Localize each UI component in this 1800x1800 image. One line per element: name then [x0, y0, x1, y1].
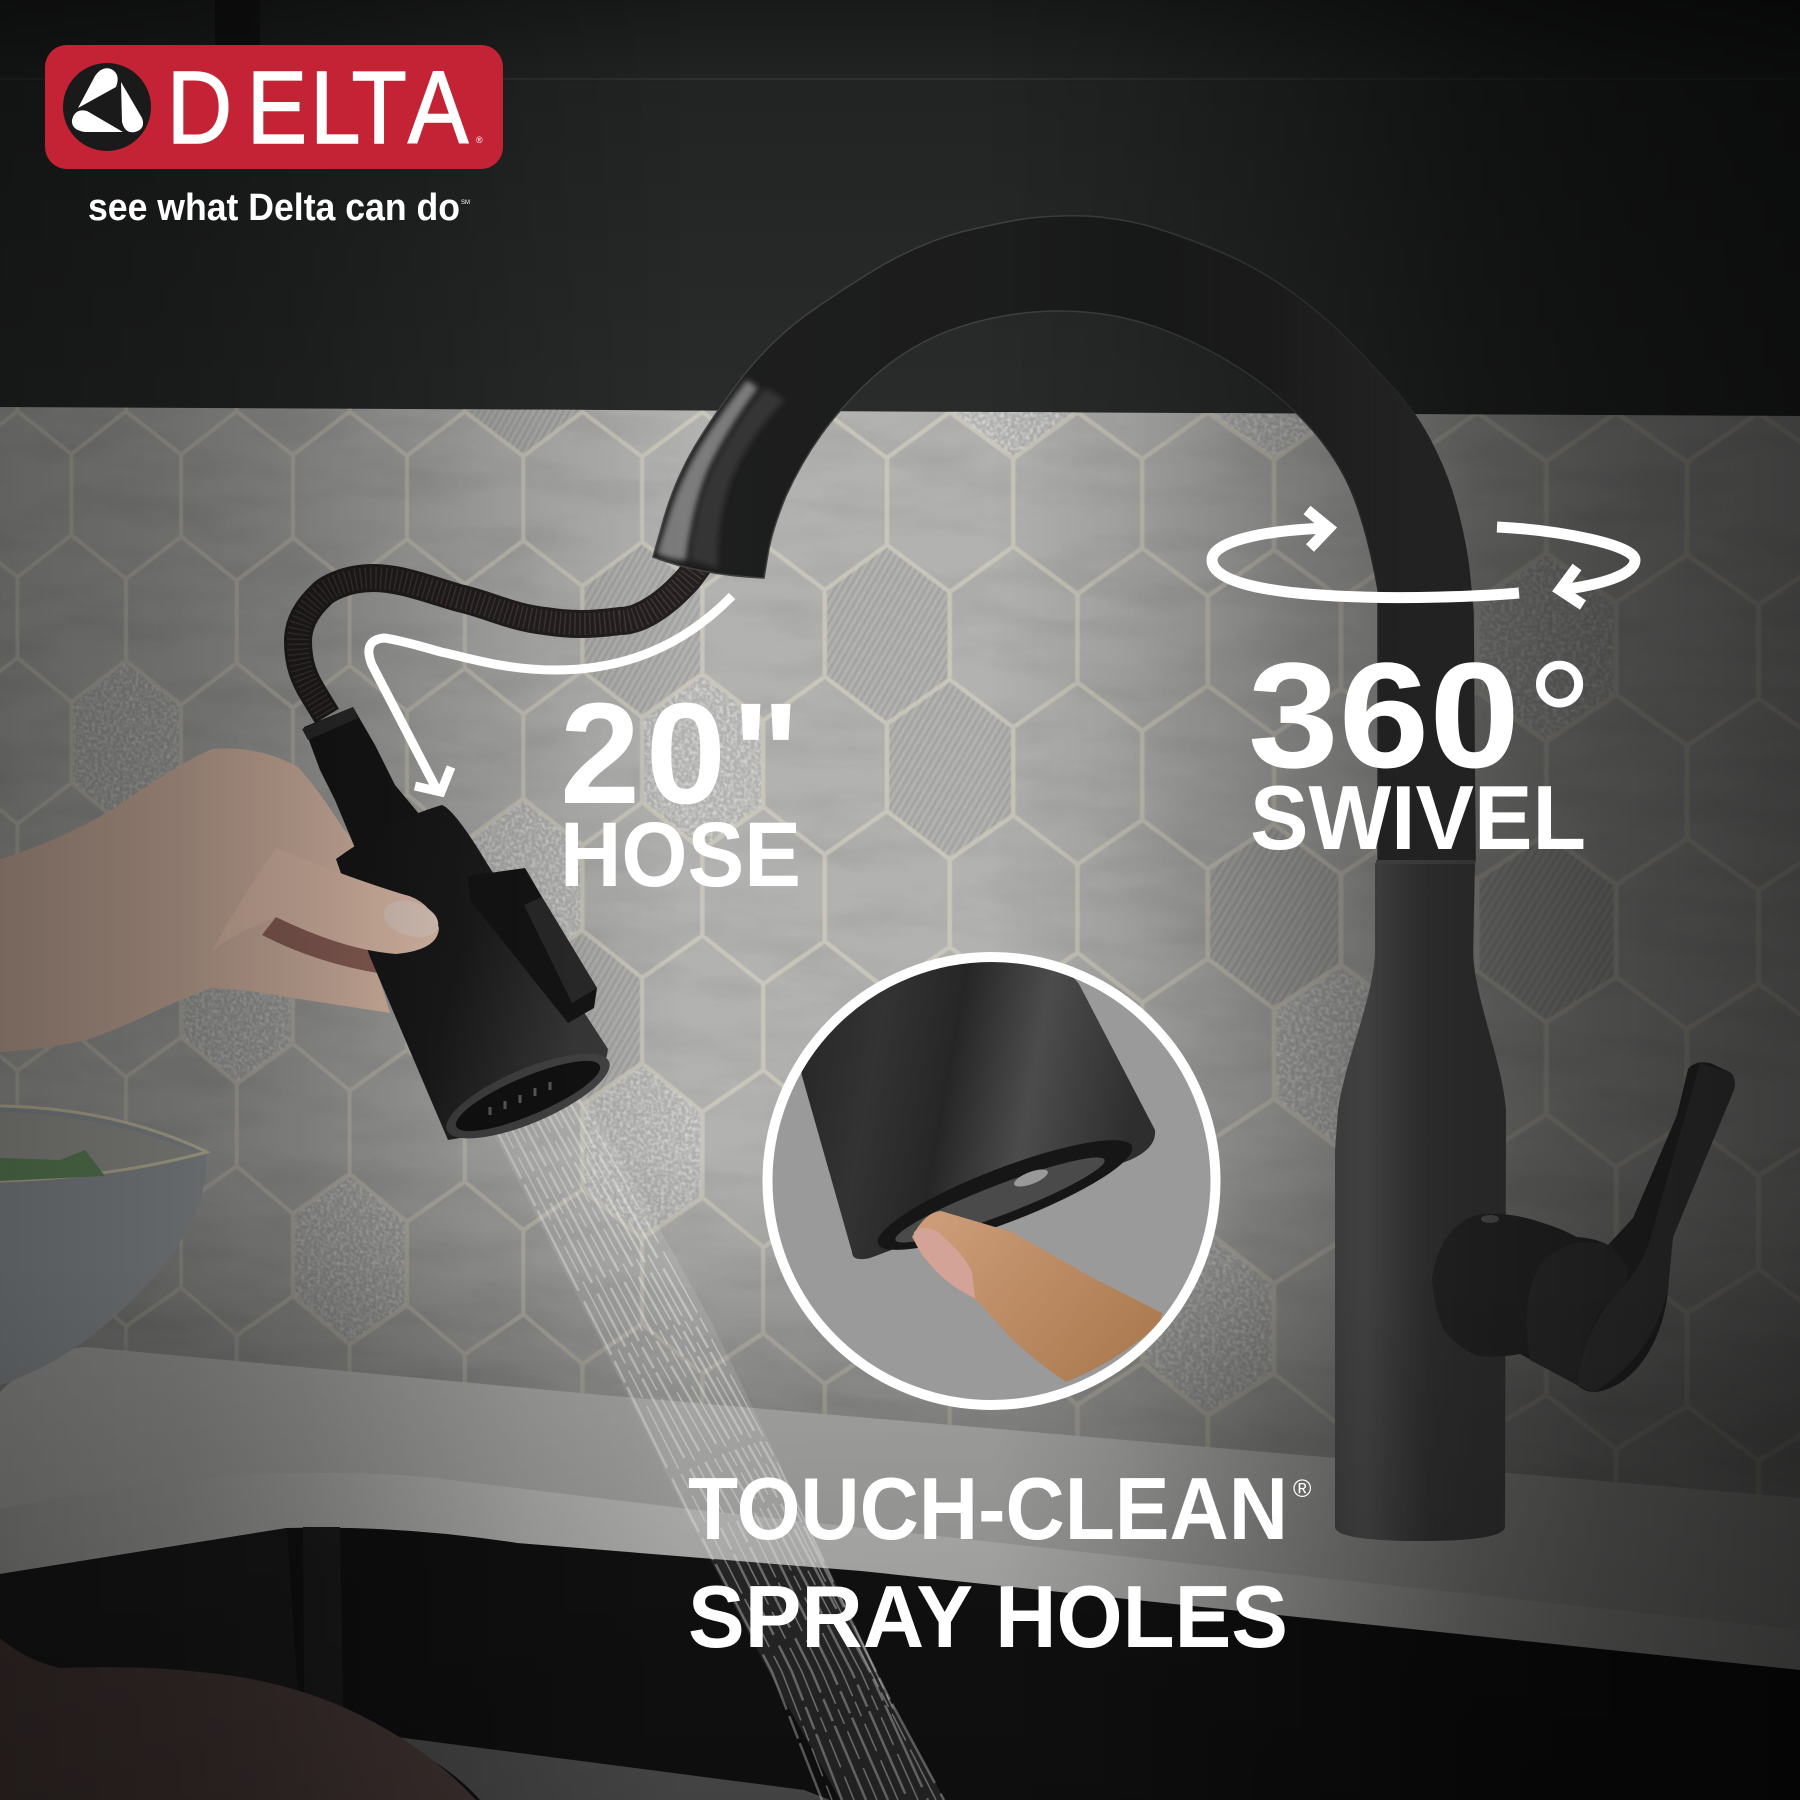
faucet spout arc — [653, 216, 1475, 861]
label: touch-clean spray holes — [688, 1459, 1312, 1666]
logo: Delta: ® — [476, 135, 483, 145]
logo: Delta — [45, 45, 503, 229]
label: touch-clean spray holes: ® — [1293, 1475, 1312, 1503]
label: 360 degree swivel — [1248, 626, 1593, 869]
sprayer buttons — [468, 868, 597, 1023]
hose connector — [304, 707, 420, 860]
faucet handle — [1432, 1062, 1735, 1392]
logo badge — [45, 45, 503, 169]
label: 360 degree swivel: ° — [1526, 626, 1593, 814]
hose — [298, 552, 708, 716]
label: touch-clean spray holes: TOUCH-CLEAN — [688, 1459, 1288, 1558]
faucet body — [1335, 863, 1506, 1541]
hand holding sprayer — [0, 748, 490, 1052]
background: hexagonal tile backsplash — [0, 407, 1790, 1447]
second hand at sink — [0, 1638, 476, 1800]
inset: fingertip — [912, 1211, 1162, 1382]
label: touch-clean spray holes: SPRAY HOLES — [688, 1567, 1288, 1666]
sprayer — [302, 707, 620, 1155]
logo tagline: see what Delta can do — [88, 187, 460, 229]
sprayer head — [336, 805, 608, 1140]
countertop — [0, 1347, 1800, 1670]
water spray — [488, 1093, 945, 1800]
label: 20 inch hose: HOSE — [560, 804, 801, 906]
striped tiles — [467, 409, 1338, 1100]
spout highlight — [657, 380, 758, 560]
faucet — [653, 216, 1735, 1541]
sink basin — [0, 1527, 1800, 1800]
logo wordmark: DELTA — [167, 50, 469, 165]
bowl — [0, 1106, 207, 1385]
label: 20 inch hose: 20" — [560, 673, 800, 834]
logo: Delta: SM — [461, 200, 470, 206]
inset: touch-clean spray holes close-up — [768, 950, 1216, 1405]
label: 20 inch hose — [560, 673, 801, 906]
callout: 20 inch hose arrow — [369, 596, 732, 792]
label: 360 degree swivel: SWIVEL — [1250, 768, 1586, 869]
callout: swivel arrows — [1212, 510, 1635, 605]
label: 360 degree swivel: 360 — [1248, 631, 1520, 799]
inset: sprayer nozzle — [801, 962, 1156, 1260]
icon: Delta triangle mark — [63, 63, 151, 151]
thumb over sprayer — [212, 848, 443, 954]
rough stone tiles — [73, 412, 1614, 1410]
